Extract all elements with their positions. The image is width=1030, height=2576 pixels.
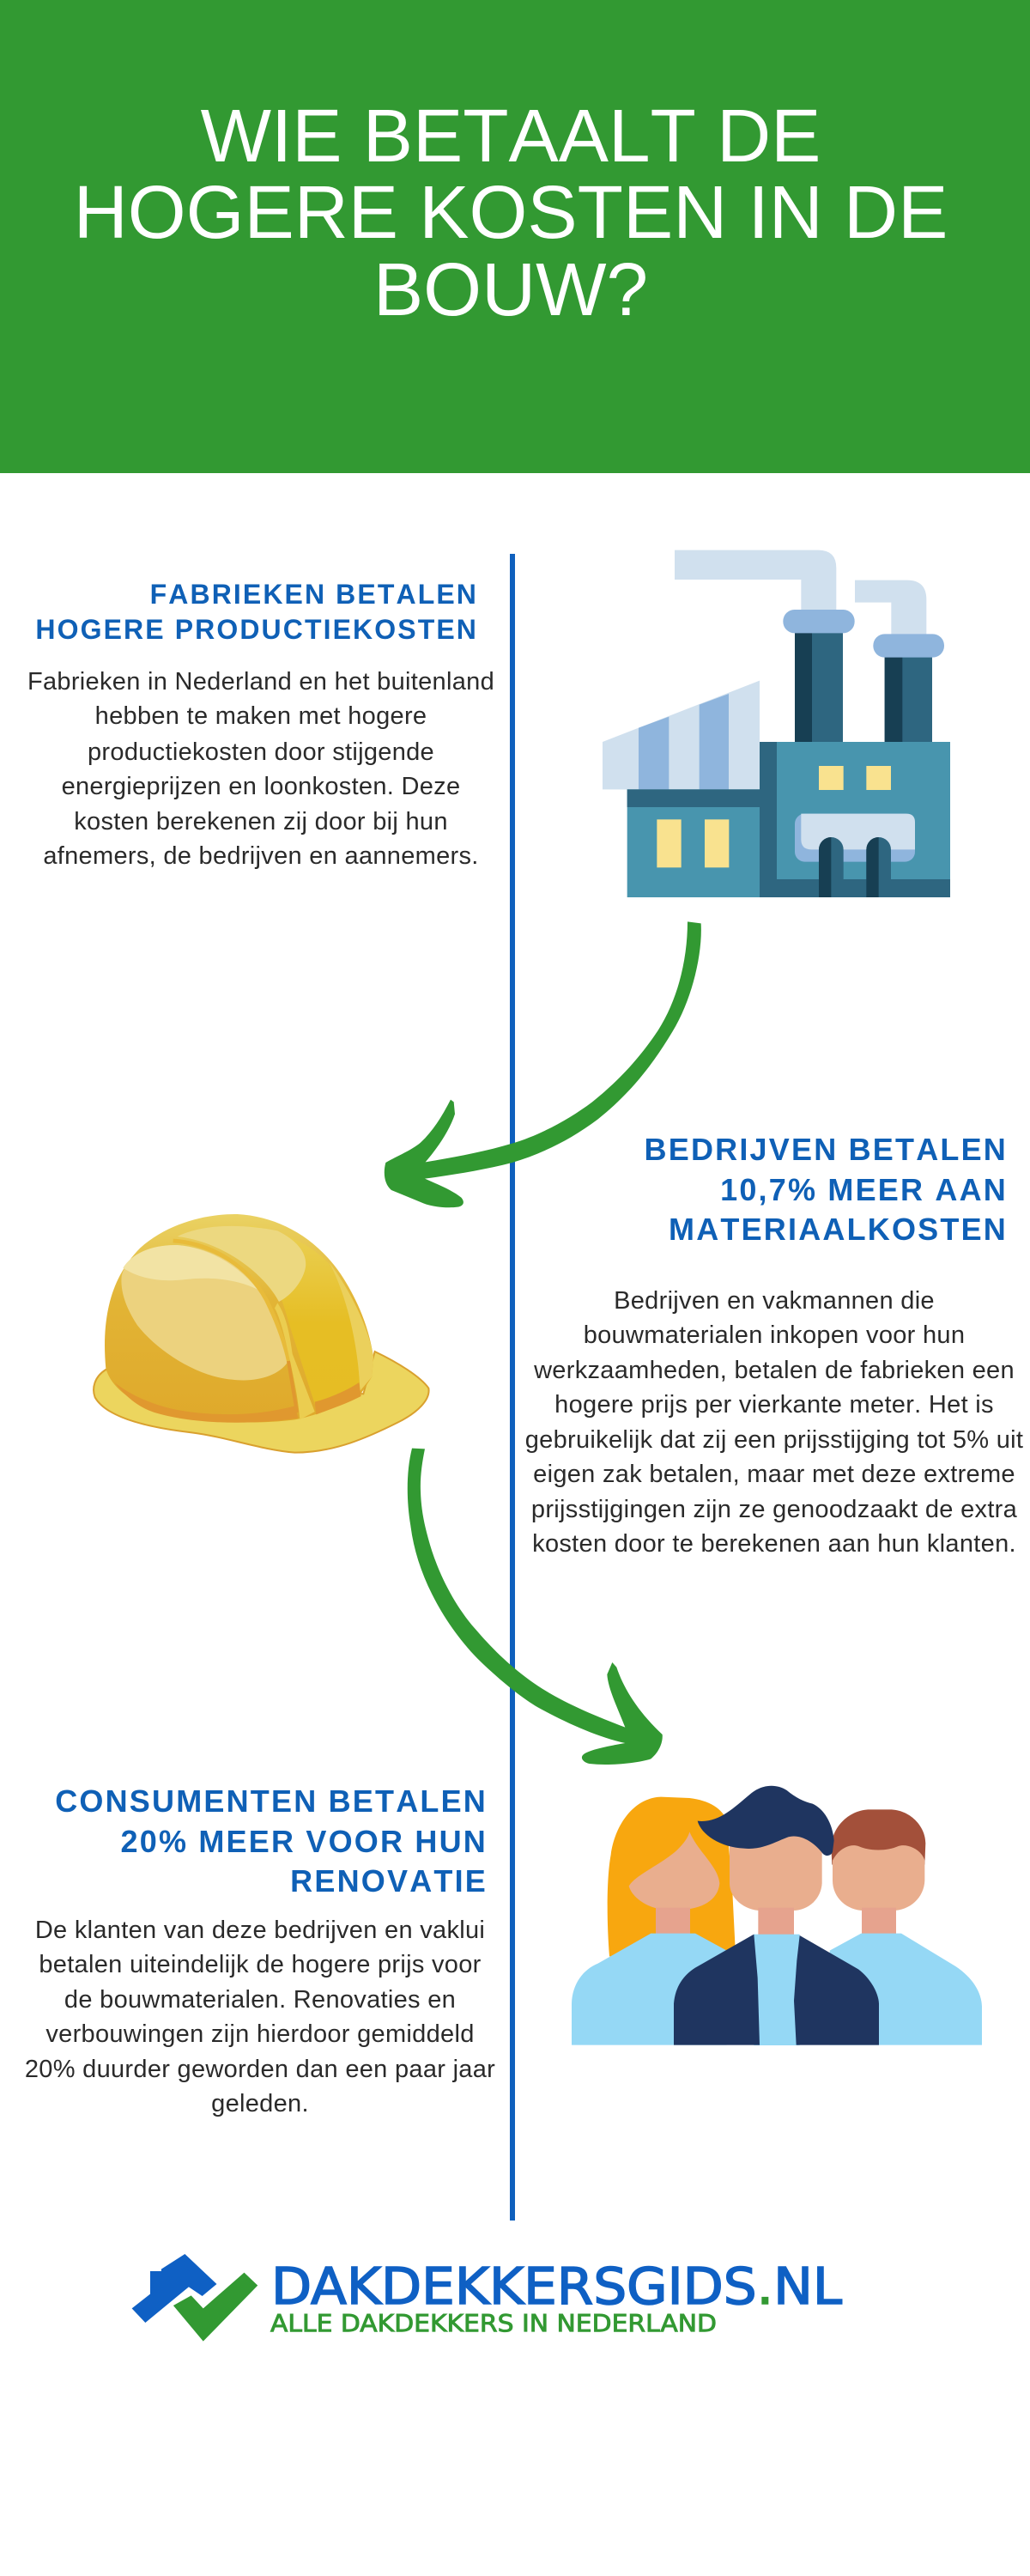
text block: factories: energieprijzen en loonkosten. Deze [62,773,460,800]
text block: factories: Fabrieken in Nederland en het buitenland [27,668,494,696]
text block: companies: gebruikelijk dat zij een prijsstijging tot 5% uit [525,1426,1023,1454]
heading: companies: 10,7% MEER AAN [720,1172,1008,1207]
title [74,94,948,331]
text block: factories: kosten berekenen zij door bij hun [74,808,448,835]
heading: factories: FABRIEKEN BETALEN [150,579,478,610]
heading: consumers: RENOVATIE [290,1863,488,1899]
text block: consumers [25,1917,495,2117]
text block: companies: eigen zak betalen, maar met deze extreme [533,1461,1015,1488]
text block: companies: bouwmaterialen inkopen voor hun [584,1321,965,1349]
text block: factories: hebben te maken met hogere [95,702,427,730]
arrow: factory to helmet [385,921,701,1207]
text block: consumers: betalen uiteindelijk de hogere prijs voor [39,1951,482,1978]
title: BOUW? [373,247,648,331]
text block: companies: kosten door te berekenen aan hun klanten. [532,1530,1016,1558]
heading: consumers: 20% MEER VOOR HUN [121,1824,488,1859]
panel: factories [27,550,950,897]
text block: factories: productiekosten door stijgende [88,738,434,766]
heading: consumers [55,1783,488,1899]
heading: companies [645,1132,1008,1247]
icon: factory [603,550,950,897]
text block: companies: prijsstijgingen zijn ze genoodzaakt de extra [531,1496,1018,1523]
heading: companies: BEDRIJVEN BETALEN [645,1132,1008,1167]
text block: factories: afnemers, de bedrijven en aannemers. [43,842,479,870]
text block: companies: Bedrijven en vakmannen die [614,1287,935,1315]
text block: companies [525,1287,1023,1558]
text block: consumers: 20% duurder geworden dan een paar jaar [25,2056,495,2083]
header band [0,0,1030,473]
text block: consumers: verbouwingen zijn hierdoor gemiddeld [45,2020,475,2048]
icon: house and check mark [132,2254,258,2342]
icon: yellow helmet [94,1214,429,1453]
heading: factories: HOGERE PRODUCTIEKOSTEN [35,614,478,645]
text block: consumers: geleden. [211,2090,309,2117]
logo wordmark: DAKDEKKERSGIDS .NL [271,2257,842,2316]
text block: factories [27,668,494,870]
logo: Dakdekkersgids.nl [132,2254,842,2342]
icon: three people [572,1786,982,2045]
text block: companies: werkzaamheden, betalen de fabrieken een [533,1357,1015,1384]
text block: companies: hogere prijs per vierkante meter. Het is [554,1391,994,1419]
text block: consumers: de bouwmaterialen. Renovaties en [64,1986,456,2014]
vertical timeline line [510,554,515,2221]
logo tagline: ALLE DAKDEKKERS IN NEDERLAND [270,2310,717,2337]
text block: consumers: De klanten van deze bedrijven en vaklui [35,1917,485,1944]
heading: companies: MATERIAALKOSTEN [669,1212,1008,1247]
heading: factories [35,579,478,645]
title: WIE BETAALT DE [201,94,821,178]
heading: consumers: CONSUMENTEN BETALEN [55,1783,488,1819]
panel: consumers [25,1783,982,2117]
title: HOGERE KOSTEN IN DE [74,170,948,254]
panel: companies [525,1132,1023,1558]
arrow: helmet to people [408,1449,663,1765]
